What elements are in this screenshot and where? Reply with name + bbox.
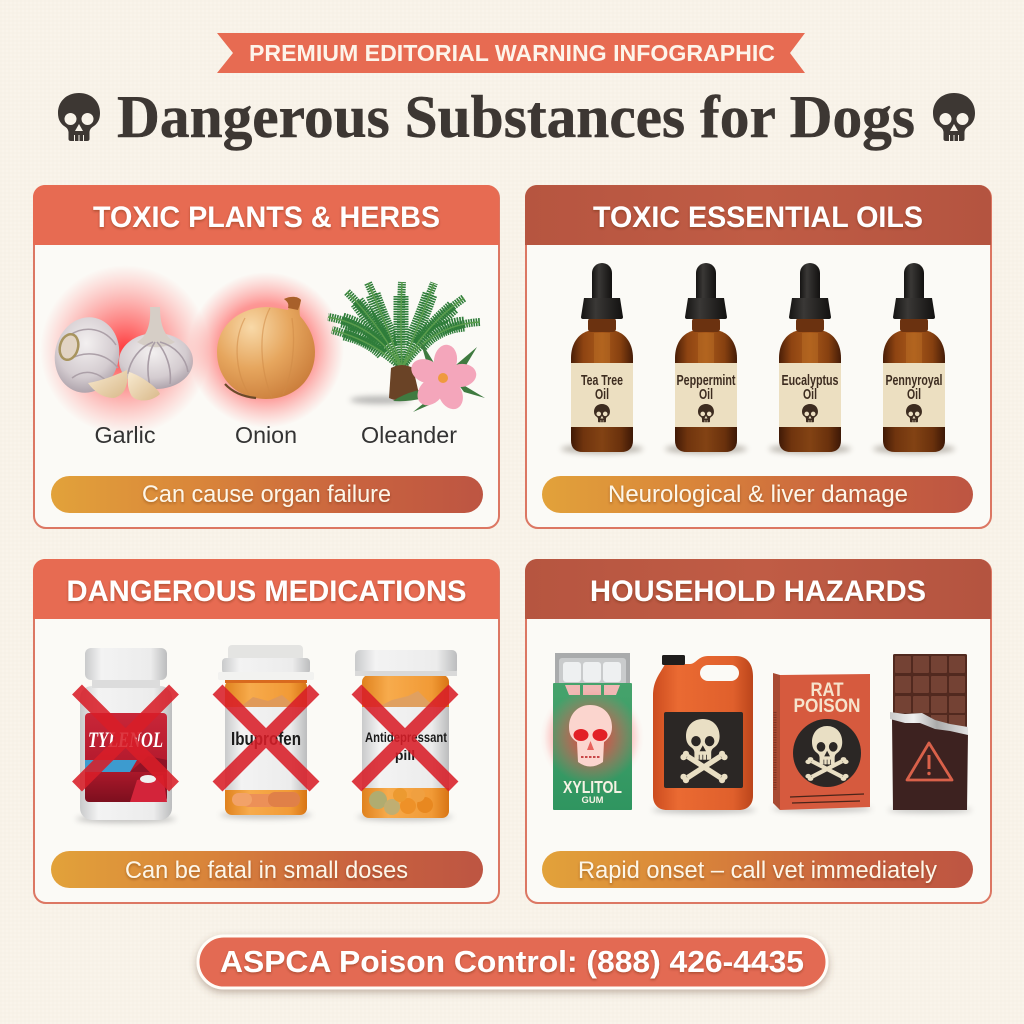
warning pill xyxy=(542,851,973,888)
chocolate bar xyxy=(888,654,972,813)
bottle: tea tree oil: Tea Tree xyxy=(581,373,623,389)
bottle: tea tree oil xyxy=(561,263,643,454)
warning pill: Can be fatal in small doses xyxy=(125,857,408,884)
icon: right skull xyxy=(933,93,975,141)
xylitol gum pack: GUM xyxy=(582,795,604,806)
panel: toxic essential oils xyxy=(525,185,991,528)
rat poison box xyxy=(772,673,872,812)
call to action: ASPCA Poison Control xyxy=(198,936,827,988)
bottle: pennyroyal oil: Oil xyxy=(907,387,921,403)
bottle: pennyroyal oil xyxy=(873,263,955,454)
bottle: pennyroyal oil: Pennyroyal xyxy=(886,373,942,389)
panel: toxic plants and herbs xyxy=(33,185,499,528)
title text: Dangerous Substances for Dogs xyxy=(117,84,915,150)
bottle: tea tree oil: Oil xyxy=(595,387,609,403)
panel header: DANGEROUS MEDICATIONS xyxy=(66,575,466,608)
panel header xyxy=(525,185,991,245)
banner: premium editorial warning infographic xyxy=(217,33,805,73)
rat poison box: POISON xyxy=(794,695,860,717)
xylitol gum pack xyxy=(540,653,644,810)
bottle: ibuprofen: Ibuprofen xyxy=(231,729,301,749)
onion xyxy=(188,272,344,428)
rat poison box: RAT xyxy=(810,679,844,701)
orange hazard jug xyxy=(652,655,756,814)
xylitol gum pack: XYLITOL xyxy=(563,777,622,797)
bottle: ibuprofen xyxy=(218,645,314,819)
icon: left skull xyxy=(58,93,100,141)
banner: premium editorial warning infographic: PREMIUM EDITORIAL WARNING INFOGRAPHIC xyxy=(249,40,775,66)
bottle: tylenol: TYLENOL xyxy=(88,727,163,752)
title xyxy=(58,84,975,150)
panel header: TOXIC PLANTS & HERBS xyxy=(93,201,440,234)
bottle: eucalyptus oil xyxy=(769,263,851,454)
bottle: antidepressant pill: Antidepressant xyxy=(365,729,447,745)
oleander xyxy=(328,282,485,413)
warning pill xyxy=(51,851,483,888)
bottle: antidepressant pill: pill xyxy=(395,747,415,763)
garlic xyxy=(40,265,210,435)
panel: household hazards xyxy=(525,559,991,903)
warning pill: Rapid onset – call vet immediately xyxy=(578,857,937,884)
panel header xyxy=(33,185,499,245)
warning pill: Neurological & liver damage xyxy=(608,481,908,508)
bottle: eucalyptus oil: Eucalyptus xyxy=(782,373,838,389)
warning pill: Can cause organ failure xyxy=(142,481,391,508)
label: oleander: Oleander xyxy=(361,422,457,448)
panel header: HOUSEHOLD HAZARDS xyxy=(590,575,926,608)
panel header: TOXIC ESSENTIAL OILS xyxy=(593,201,923,234)
bottle: peppermint oil: Oil xyxy=(699,387,713,403)
bottle: eucalyptus oil: Oil xyxy=(803,387,817,403)
call to action: ASPCA Poison Control: ASPCA Poison Control: (888) 426-4435 xyxy=(220,944,804,979)
bottle: peppermint oil: Peppermint xyxy=(676,373,736,389)
bottle: antidepressant pill xyxy=(355,650,457,821)
warning pill xyxy=(542,476,973,513)
label: onion: Onion xyxy=(235,422,297,448)
bottle: tylenol xyxy=(76,648,176,823)
panel header xyxy=(33,559,499,619)
panel header xyxy=(525,559,991,619)
bottle: peppermint oil xyxy=(665,263,747,454)
label: garlic: Garlic xyxy=(94,422,156,448)
panel: dangerous medications xyxy=(33,559,499,903)
warning pill xyxy=(51,476,483,513)
